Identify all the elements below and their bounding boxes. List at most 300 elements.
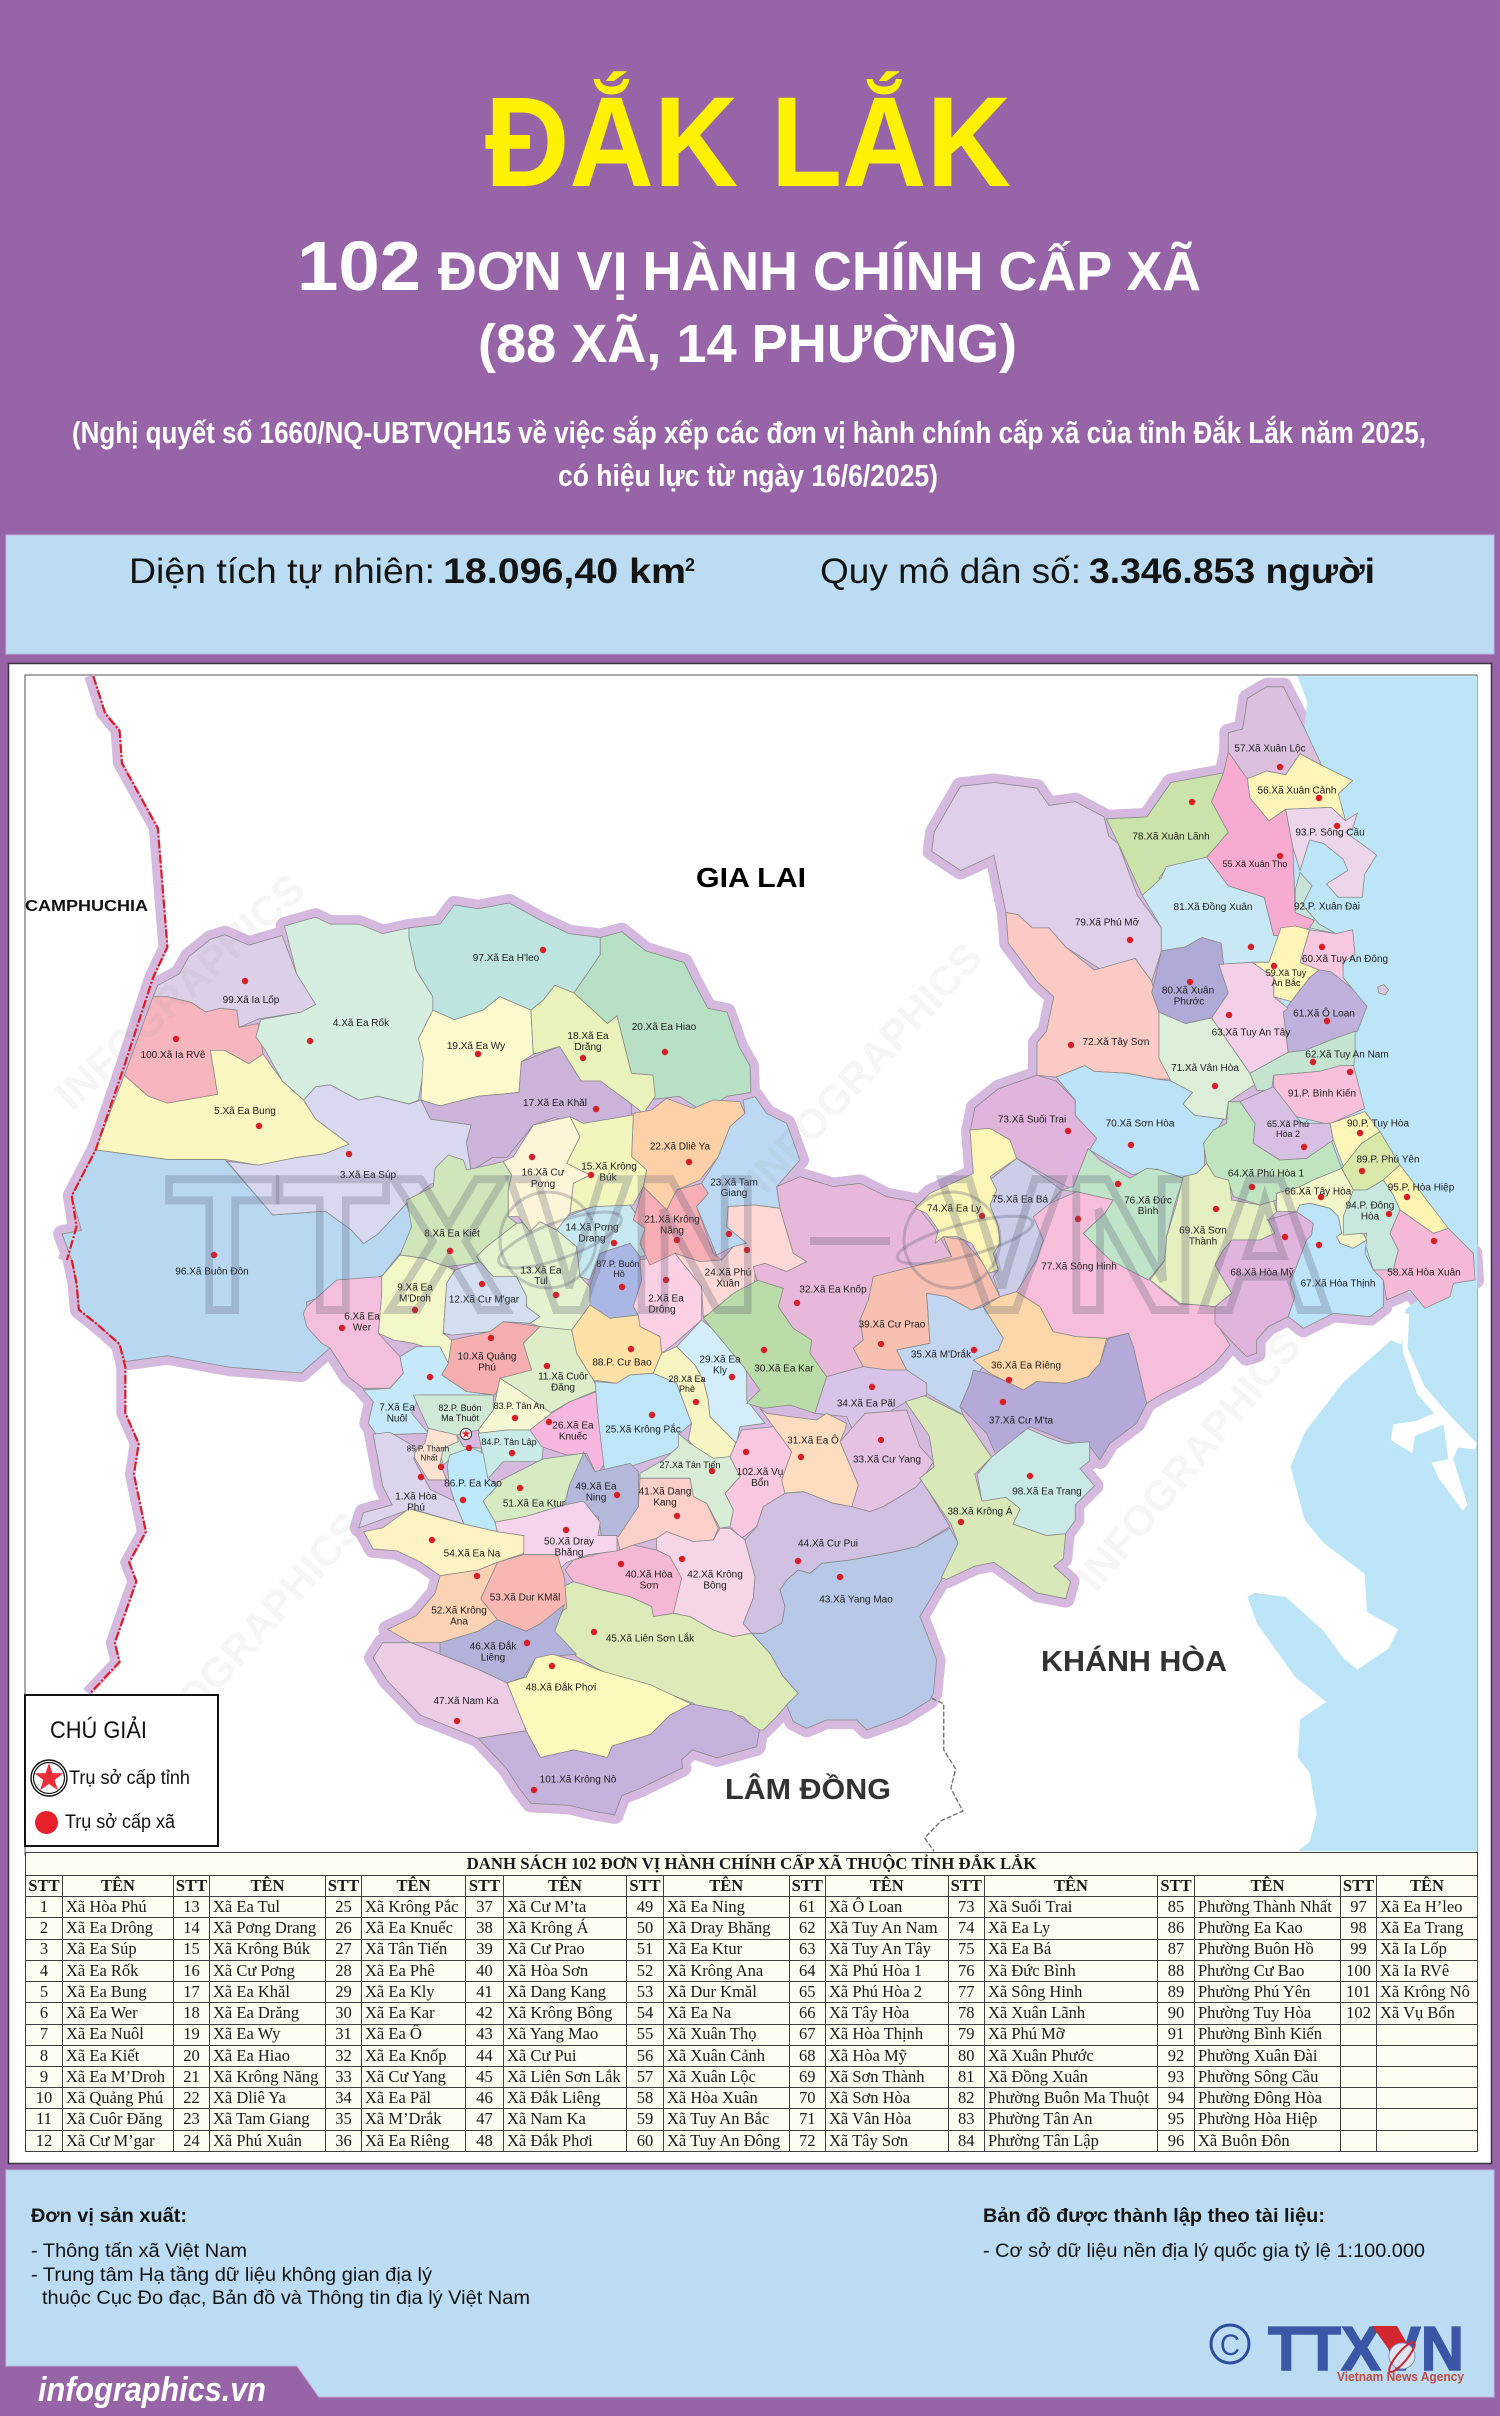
commune 88 xyxy=(572,1305,662,1383)
map: commune labels: 75.Xã Ea Bá xyxy=(992,1194,1049,1206)
table: list of 102 communes: STT xyxy=(176,1876,207,1895)
commune 25 xyxy=(595,1373,692,1475)
map: Cambodia border halo xyxy=(63,676,163,1692)
table: list of 102 communes: Xã Xuân Lộc xyxy=(667,2067,756,2086)
commune 42 xyxy=(657,1528,755,1637)
table: list of 102 communes: 65 xyxy=(799,1982,816,2001)
map: commune labels: 7.Xã Ea xyxy=(379,1402,415,1414)
table: list of 102 communes: 64 xyxy=(799,1961,816,1980)
table: list of 102 communes: Xã Ea Ly xyxy=(988,1918,1050,1937)
map: commune labels: 13.Xã Ea xyxy=(520,1266,562,1276)
table: list of 102 communes: 50 xyxy=(637,1918,653,1937)
island xyxy=(1378,985,1389,995)
commune 102 xyxy=(725,1427,792,1538)
map: commune labels: 62.Xã Tuy An Nam xyxy=(1305,1050,1389,1060)
table: list of 102 communes: 43 xyxy=(476,2024,493,2043)
table: list of 102 communes: 31 xyxy=(335,2024,352,2043)
map: commune labels: 42.Xã Krông xyxy=(687,1570,743,1580)
table: list of 102 communes: Xã Ea Knốp xyxy=(365,2046,447,2065)
commune 90 xyxy=(1330,1112,1380,1167)
map: commune labels: 9.Xã Ea xyxy=(397,1282,433,1294)
map: commune labels: 55.Xã Xuân Thọ xyxy=(1223,859,1287,869)
commune 5 xyxy=(96,1050,349,1165)
icon: commune headquarters xyxy=(35,1811,58,1834)
table: list of 102 communes: 34 xyxy=(335,2088,352,2107)
map: commune labels: Liêng xyxy=(481,1652,505,1664)
commune 4 xyxy=(256,917,433,1104)
table: list of 102 communes: Xã Ea Khăl xyxy=(213,1982,290,2001)
table: list of 102 communes: 30 xyxy=(335,2003,352,2022)
frame: north-east communes xyxy=(932,687,1389,1190)
table: list of 102 communes: Xã Ea Wy xyxy=(213,2024,280,2043)
commune 48 xyxy=(507,1654,691,1758)
map: commune labels: 26.Xã Ea xyxy=(552,1420,594,1432)
table: list of 102 communes: Xã Sơn Thành xyxy=(829,2067,924,2086)
table: list of 102 communes: STT xyxy=(328,1876,359,1895)
table: list of 102 communes: Xã Krông Pắc xyxy=(365,1897,458,1916)
table: list of 102 communes: 29 xyxy=(335,1982,352,2001)
table: list of 102 communes: 74 xyxy=(958,1918,974,1937)
commune 43 xyxy=(752,1528,958,1730)
subtitle: ĐƠN VỊ HÀNH CHÍNH CẤP XÃ xyxy=(438,240,1201,302)
commune 13 xyxy=(477,1222,590,1330)
table: list of 102 communes: 102 xyxy=(1346,2003,1371,2022)
map: commune labels: 4.Xã Ea Rốk xyxy=(333,1017,390,1029)
map: commune labels: 1.Xã Hòa xyxy=(395,1492,437,1502)
map: commune labels: 16.Xã Cư xyxy=(522,1168,565,1178)
table: list of 102 communes: Xã Hòa Thịnh xyxy=(829,2024,923,2043)
map: commune labels: 95.P. Hòa Hiệp xyxy=(1388,1182,1455,1194)
map: commune labels: 41.Xã Dang xyxy=(639,1486,691,1498)
commune 15 xyxy=(567,1115,647,1213)
commune 94 xyxy=(1340,1180,1400,1270)
icon: copyright xyxy=(1211,2325,1249,2363)
commune 17 xyxy=(421,1047,631,1171)
commune 81 xyxy=(1142,857,1281,964)
map label: Khanh Hoa: KHÁNH HÒA xyxy=(1041,1644,1227,1678)
table: list of 102 communes: 67 xyxy=(799,2024,816,2043)
commune 12 xyxy=(443,1262,540,1335)
watermark: TTXVN: TTXVN xyxy=(167,1139,760,1351)
table: list of 102 communes: Xã M’Drắk xyxy=(365,2109,442,2128)
commune 70 xyxy=(1056,1066,1224,1180)
map: commune labels: 99.Xã Ia Lốp xyxy=(223,994,280,1006)
commune 54 xyxy=(364,1509,526,1576)
table: list of 102 communes: 36 xyxy=(335,2131,352,2150)
commune 55 xyxy=(1207,752,1314,936)
logo: TTXVN: TTXVN xyxy=(1268,2315,1464,2384)
table: list of 102 communes: 24 xyxy=(183,2131,200,2150)
table: list of 102 communes: Xã Phú Hòa 2 xyxy=(829,1982,922,2001)
table: list of 102 communes: Xã Dang Kang xyxy=(507,1982,606,2001)
footer: producer lines: - Trung tâm Hạ tầng dữ liệu không gian địa lý xyxy=(31,2265,433,2286)
commune 77 xyxy=(1017,1192,1230,1403)
table: list of 102 communes: Xã Vân Hòa xyxy=(829,2109,911,2128)
resolution note line 2: có hiệu lực từ ngày 16/6/2025) xyxy=(558,458,938,493)
table: list of 102 communes: Xã Đồng Xuân xyxy=(988,2067,1088,2086)
watermark: infographics diagonals: INFOGRAPHICS xyxy=(46,865,314,1119)
map: commune labels: Hòa 2 xyxy=(1276,1129,1300,1139)
map: commune labels: 18.Xã Ea xyxy=(567,1031,609,1042)
table: list of 102 communes: 98 xyxy=(1350,1918,1367,1937)
map: commune labels: 64.Xã Phú Hòa 1 xyxy=(1228,1168,1305,1180)
watermark: dash xyxy=(810,1237,890,1245)
table: list of 102 communes: 76 xyxy=(958,1961,974,1980)
stat: area label: Diện tích tự nhiên: xyxy=(129,552,435,591)
table: list of 102 communes: Xã Cư Pơng xyxy=(213,1961,295,1980)
table: list of 102 communes: 92 xyxy=(1168,2046,1184,2065)
table: list of 102 communes: 32 xyxy=(335,2046,352,2065)
commune 93 xyxy=(1286,807,1377,897)
table: list of 102 communes: 77 xyxy=(958,1982,974,2001)
table: list of 102 communes: Xã Ia RVê xyxy=(1380,1961,1449,1980)
table: list of 102 communes: Xã Tuy An Đông xyxy=(667,2131,780,2150)
table: list of 102 communes: Xã Cư M’gar xyxy=(66,2131,155,2150)
commune 83 xyxy=(478,1378,552,1433)
commune 19 xyxy=(419,997,533,1106)
table: list of 102 communes: Phường Sông Cầu xyxy=(1198,2067,1318,2086)
commune 69 xyxy=(1150,1163,1277,1307)
map: commune labels xyxy=(141,744,1461,1786)
commune 6 xyxy=(303,1277,403,1388)
map: commune labels: Bhăng xyxy=(555,1548,583,1558)
table: list of 102 communes: 8 xyxy=(40,2046,48,2065)
table: list of 102 communes: Xã Nam Ka xyxy=(507,2109,586,2128)
map: commune labels: Drang xyxy=(578,1234,606,1244)
watermark: VNA: VNA xyxy=(940,1139,1332,1351)
table: list of 102 communes: Xã Ea Hiao xyxy=(213,2046,290,2065)
map: commune labels: 24.Xã Phú xyxy=(705,1268,751,1278)
table: list of 102 communes: 91 xyxy=(1168,2024,1184,2043)
commune 2 xyxy=(630,1253,702,1353)
table: list of 102 communes: 70 xyxy=(799,2088,816,2107)
table: list of 102 communes: Phường Đông Hòa xyxy=(1198,2088,1322,2107)
table: list of 102 communes: 90 xyxy=(1168,2003,1184,2022)
map: commune labels: Bông xyxy=(703,1580,727,1592)
watermark: infographics diagonals: INFOGRAPHICS xyxy=(737,934,991,1201)
table: list of 102 communes: Xã Xuân Cảnh xyxy=(667,2046,765,2065)
commune 101 xyxy=(478,1704,760,1815)
table: list of 102 communes: Xã Ea Phê xyxy=(365,1961,435,1980)
table: list of 102 communes: 58 xyxy=(637,2088,653,2107)
subtitle second line: (88 XÃ, 14 PHƯỜNG) xyxy=(478,314,1017,374)
table: list of 102 communes: 46 xyxy=(476,2088,493,2107)
map: commune labels: 82.P. Buôn xyxy=(438,1403,482,1413)
table: list of 102 communes: 41 xyxy=(476,1982,493,2001)
commune 98 xyxy=(977,1428,1094,1536)
commune 41 xyxy=(617,1478,718,1550)
icon: provincial headquarters xyxy=(31,1760,67,1796)
watermark: infographics diagonals: INFOGRAPHICS xyxy=(122,1503,372,1774)
table: list of 102 communes: 59 xyxy=(637,2109,653,2128)
map: commune labels: Drăng xyxy=(574,1042,602,1053)
map: commune labels: Ana xyxy=(450,1616,468,1628)
subtitle number: 102 xyxy=(297,227,421,305)
footer: producer heading: Đơn vị sản xuất: xyxy=(31,2206,187,2227)
map: commune labels: 31.Xã Ea Ô xyxy=(787,1434,839,1446)
map: commune labels: 48.Xã Đắk Phơi xyxy=(526,1680,596,1694)
table: list of 102 communes: 17 xyxy=(183,1982,200,2001)
table: list of 102 communes: Xã Krông Nô xyxy=(1380,1982,1470,2001)
table: list of 102 communes: Xã Xuân Phước xyxy=(988,2046,1094,2065)
table: list of 102 communes: 100 xyxy=(1346,1961,1371,1980)
table: list of 102 communes: 16 xyxy=(183,1961,200,1980)
table: list of 102 communes: Xã Tân Tiến xyxy=(365,1939,447,1958)
commune 38 xyxy=(905,1396,1070,1599)
frame: central west communes xyxy=(303,1097,807,1480)
table: list of 102 communes: 12 xyxy=(36,2131,52,2150)
table: list of 102 communes: 101 xyxy=(1346,1982,1371,2001)
table: list of 102 communes: 81 xyxy=(958,2067,974,2086)
commune 79 xyxy=(932,782,1161,981)
logo: globe xyxy=(1386,2339,1418,2375)
map: commune labels: 8.Xã Ea Kiết xyxy=(424,1228,480,1240)
table: list of 102 communes: 89 xyxy=(1168,1982,1184,2001)
table: list of 102 communes: Xã Hòa Sơn xyxy=(507,1961,588,1980)
map: commune labels: Phước xyxy=(1174,996,1204,1008)
map: commune labels: 69.Xã Sơn xyxy=(1179,1226,1227,1236)
map: border line towards Lam Dong xyxy=(925,1698,963,1851)
table: list of 102 communes: Xã Cư M’ta xyxy=(507,1897,586,1916)
table: list of 102 communes: 52 xyxy=(637,1961,653,1980)
map: commune labels: 88.P. Cư Bao xyxy=(592,1358,652,1368)
table: list of 102 communes: Xã Krông Bông xyxy=(507,2003,612,2022)
table: list of 102 communes: 85 xyxy=(1168,1897,1184,1916)
table: list of 102 communes: TÊN xyxy=(1054,1876,1088,1895)
map: commune labels: 78.Xã Xuân Lãnh xyxy=(1132,832,1210,842)
map: commune labels: 51.Xã Ea Ktur xyxy=(503,1498,566,1510)
commune 82 xyxy=(413,1395,493,1465)
commune 89 xyxy=(1342,1132,1400,1190)
table: list of 102 communes: Xã Suối Trai xyxy=(988,1897,1072,1916)
table: list of 102 communes: 22 xyxy=(183,2088,200,2107)
commune 84 xyxy=(478,1430,543,1480)
table: list of 102 communes: 38 xyxy=(476,1918,493,1937)
commune 92 xyxy=(1295,872,1336,934)
stat: population value: 3.346.853 người xyxy=(1089,552,1375,591)
table: list of 102 communes: Xã Xuân Lãnh xyxy=(988,2003,1085,2022)
table: list of 102 communes: STT xyxy=(469,1876,500,1895)
map: commune labels: 35.Xã M'Drắk xyxy=(911,1348,972,1360)
table: list of 102 communes: 51 xyxy=(637,1939,653,1958)
map: commune labels: 79.Xã Phú Mỡ xyxy=(1075,918,1140,928)
table: list of 102 communes: Xã Vụ Bổn xyxy=(1380,2003,1455,2022)
table: list of 102 communes: Xã Ea Trang xyxy=(1380,1918,1463,1937)
map: commune labels: 97.Xã Ea H'leo xyxy=(473,953,540,964)
table: list of 102 communes: Phường Tân An xyxy=(988,2109,1092,2128)
table: list of 102 communes: Phường Ea Kao xyxy=(1198,1918,1303,1937)
table: list of 102 communes: 2 xyxy=(40,1918,48,1937)
table: list of 102 communes: Xã Ea Ktur xyxy=(667,1939,742,1958)
table: list of 102 communes: Xã Phú Xuân xyxy=(213,2131,302,2150)
map: commune labels: 44.Xã Cư Pui xyxy=(798,1538,858,1550)
map: sea south xyxy=(1247,1260,1477,1851)
map: commune labels: 11.Xã Cuôr xyxy=(538,1372,589,1382)
table: list of 102 communes: TÊN xyxy=(870,1876,904,1895)
map: commune labels: 2.Xã Ea xyxy=(648,1294,684,1304)
map: commune labels: 43.Xã Yang Mao xyxy=(819,1594,893,1606)
table: list of 102 communes: Phường Phú Yên xyxy=(1198,1982,1310,2001)
map: commune labels: 65.Xã Phú xyxy=(1267,1119,1309,1129)
table: list of 102 communes: Xã Cư Prao xyxy=(507,1939,585,1958)
table: list of 102 communes: DANH SÁCH 102 ĐƠN VỊ HÀNH CHÍNH CẤP XÃ THUỘC TỈNH ĐẮK LẮK xyxy=(467,1854,1036,1873)
table: list of 102 communes: 60 xyxy=(637,2131,653,2150)
table: list of 102 communes: Xã Hòa Xuân xyxy=(667,2088,758,2107)
table: list of 102 communes: 39 xyxy=(476,1939,493,1958)
map: commune labels: Bình xyxy=(1138,1206,1158,1217)
table: list of 102 communes: STT xyxy=(1343,1876,1374,1895)
map: commune labels: 52.Xã Krông xyxy=(431,1606,487,1616)
map: commune polygons xyxy=(62,687,1475,1815)
commune 30 xyxy=(703,1280,827,1413)
commune 78 xyxy=(1106,773,1228,895)
frame: south-central communes xyxy=(553,1408,958,1730)
table: list of 102 communes: 54 xyxy=(637,2003,653,2022)
table: list of 102 communes: 63 xyxy=(799,1939,816,1958)
commune 26 xyxy=(530,1392,605,1475)
map: commune labels: 21.Xã Krông xyxy=(644,1214,700,1226)
commune 1 xyxy=(359,1432,464,1528)
table: list of 102 communes: Xã Ô Loan xyxy=(829,1897,902,1916)
map: commune labels: 49.Xã Ea xyxy=(575,1482,617,1492)
table: list of 102 communes: Xã Tuy An Tây xyxy=(829,1939,931,1958)
table: list of 102 communes: 19 xyxy=(183,2024,200,2043)
table: list of 102 communes: Xã Ea Riêng xyxy=(365,2131,449,2150)
commune 56 xyxy=(1247,754,1353,821)
map: commune labels: 93.P. Sông Cầu xyxy=(1295,826,1365,838)
table: list of 102 communes: Xã Đắk Liêng xyxy=(507,2088,600,2107)
table: list of 102 communes: 69 xyxy=(799,2067,816,2086)
table: list of 102 communes: Xã Ea Păl xyxy=(365,2088,431,2107)
map: commune labels: 63.Xã Tuy An Tây xyxy=(1212,1028,1290,1038)
table: list of 102 communes: 45 xyxy=(476,2067,493,2086)
commune 10 xyxy=(442,1322,540,1395)
table: list of 102 communes: 93 xyxy=(1168,2067,1184,2086)
map: commune labels: 98.Xã Ea Trang xyxy=(1012,1486,1082,1498)
map: commune labels: 28.Xã Ea xyxy=(668,1374,706,1384)
map: commune labels: Búk xyxy=(599,1172,618,1184)
table: list of 102 communes: 18 xyxy=(183,2003,200,2022)
table: list of 102 communes: 55 xyxy=(637,2024,653,2043)
commune 64 xyxy=(1203,1102,1342,1205)
map: commune labels: 61.Xã Ô Loan xyxy=(1293,1006,1355,1020)
map: commune labels: 53.Xã Dur KMăl xyxy=(490,1592,560,1604)
map: commune labels: 46.Xã Đắk xyxy=(470,1640,517,1652)
table: list of 102 communes: 6 xyxy=(40,2003,48,2022)
table: list of 102 communes: Xã Phú Mỡ xyxy=(988,2024,1065,2043)
commune 57 xyxy=(1228,687,1322,782)
table: list of 102 communes: Xã Tuy An Nam xyxy=(829,1918,938,1937)
table: list of 102 communes: STT xyxy=(1160,1876,1192,1895)
map: commune labels: 40.Xã Hòa xyxy=(625,1570,673,1580)
table: list of 102 communes: Xã Krông Năng xyxy=(213,2067,318,2086)
commune 40 xyxy=(565,1545,682,1617)
table: list of 102 communes: Xã Buôn Đôn xyxy=(1198,2131,1290,2150)
table: list of 102 communes: 97 xyxy=(1350,1897,1367,1916)
table: list of 102 communes: 15 xyxy=(183,1939,200,1958)
map: commune labels: 36.Xã Ea Riêng xyxy=(991,1360,1061,1372)
table: list of 102 communes: Xã Tam Giang xyxy=(213,2109,310,2128)
map: commune labels: 87.P. Buôn xyxy=(596,1259,640,1269)
commune 18 xyxy=(531,985,655,1113)
table: list of 102 communes: Xã Ea Bá xyxy=(988,1939,1051,1958)
commune 21 xyxy=(633,1183,722,1265)
table: list of 102 communes: Xã Ia Lốp xyxy=(1380,1939,1447,1958)
table: list of 102 communes: Xã Xuân Thọ xyxy=(667,2024,757,2043)
map: commune labels: 91.P. Bình Kiến xyxy=(1288,1088,1356,1100)
commune 100 xyxy=(124,997,263,1103)
map label: Lam Dong: LÂM ĐỒNG xyxy=(725,1772,891,1806)
table: list of 102 communes: 73 xyxy=(958,1897,974,1916)
table: list of 102 communes: Xã Cuôr Đăng xyxy=(66,2109,162,2128)
table: list of 102 communes: Xã Ea Ning xyxy=(667,1897,745,1916)
table: list of 102 communes: 9 xyxy=(40,2067,48,2086)
map: commune labels: Phú xyxy=(407,1502,425,1514)
table: list of 102 communes: 48 xyxy=(476,2131,493,2150)
table: list of 102 communes: Phường Cư Bao xyxy=(1198,1961,1304,1980)
stat: area value: 18.096,40 km xyxy=(443,552,686,591)
table: list of 102 communes: 21 xyxy=(183,2067,200,2086)
stat: area superscript: 2 xyxy=(685,555,695,575)
watermark: infographics diagonals xyxy=(46,865,1310,1774)
table: list of 102 communes: 62 xyxy=(799,1918,816,1937)
table: list of 102 communes: 99 xyxy=(1350,1939,1367,1958)
commune 87 xyxy=(590,1243,642,1318)
map: commune labels: 23.Xã Tam xyxy=(710,1178,758,1188)
legend heading: CHÚ GIẢI xyxy=(50,1715,147,1744)
map: commune labels: Nhất xyxy=(421,1454,438,1462)
map: commune labels: 37.Xã Cư M'ta xyxy=(989,1416,1054,1426)
table: list of 102 communes: Xã Tây Sơn xyxy=(829,2131,908,2150)
title: ĐẮK LẮK xyxy=(485,70,1011,214)
map label: Cambodia: CAMPHUCHIA xyxy=(25,898,149,915)
table: list of 102 communes: TÊN xyxy=(101,1876,135,1895)
commune 71 xyxy=(1159,1012,1255,1119)
table: list of 102 communes: 35 xyxy=(335,2109,352,2128)
table: list of 102 communes: Xã Hòa Phú xyxy=(66,1897,147,1916)
commune 97 xyxy=(409,903,600,1020)
panel: map card xyxy=(8,664,1492,2164)
table: list of 102 communes: Phường Xuân Đài xyxy=(1198,2046,1317,2065)
frame: south-east coast communes xyxy=(1150,1087,1475,1357)
table: list of 102 communes: 23 xyxy=(183,2109,200,2128)
map: commune labels: 89.P. Phú Yên xyxy=(1356,1154,1420,1166)
commune 36 xyxy=(973,1292,1107,1390)
table: list of 102 communes: Xã Sông Hinh xyxy=(988,1982,1082,2001)
table: list of 102 communes: Xã Ea Tul xyxy=(213,1897,280,1916)
commune 14 xyxy=(557,1205,650,1280)
commune 23 xyxy=(697,1097,800,1255)
table: list of 102 communes: Xã Cư Yang xyxy=(365,2067,446,2086)
map: commune labels: Phú xyxy=(478,1362,496,1374)
table: list of 102 communes: 56 xyxy=(637,2046,653,2065)
commune 46 xyxy=(440,1604,576,1683)
table: list of 102 communes: 86 xyxy=(1168,1918,1184,1937)
commune 27 xyxy=(640,1433,740,1528)
table: list of 102 communes: Xã Dur Kmăl xyxy=(667,1982,757,2001)
map: commune labels: 38.Xã Krông Á xyxy=(947,1504,1013,1518)
map: commune labels: 54.Xã Ea Na xyxy=(444,1548,501,1560)
commune 99 xyxy=(153,935,316,1027)
map: commune labels: Đăng xyxy=(551,1382,575,1394)
map frame xyxy=(25,675,1477,1855)
table: list of 102 communes: 47 xyxy=(476,2109,493,2128)
frame: south-east inland communes xyxy=(905,1396,1094,1599)
table: list of 102 communes: Xã Ea Ô xyxy=(365,2024,422,2043)
frame: north-west communes xyxy=(62,903,751,1373)
footer: sources line: - Cơ sở dữ liệu nền địa lý quốc gia tỷ lệ 1:100.000 xyxy=(983,2241,1425,2262)
table: list of 102 communes: STT xyxy=(951,1876,982,1895)
